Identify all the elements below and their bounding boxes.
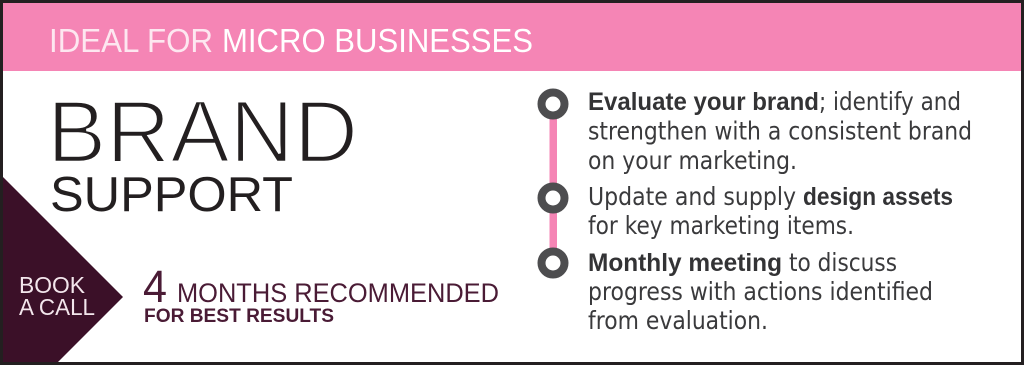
call to action arrow	[3, 177, 123, 362]
text block: evaluate your brand: Evaluate your brand	[588, 88, 819, 116]
header band	[3, 3, 1021, 71]
text block: evaluate your brand: strengthen with a consistent brand	[588, 116, 972, 146]
text block: design assets: for key marketing items.	[588, 211, 854, 240]
text block: monthly meeting: to discuss	[789, 248, 897, 277]
text block: evaluate your brand: on your marketing.	[588, 146, 797, 175]
text block: design assets	[588, 182, 953, 240]
text block: monthly meeting	[588, 248, 933, 335]
recommendation text	[143, 261, 499, 327]
call to action arrow: BOOK	[19, 272, 86, 298]
text block: monthly meeting: Monthly meeting	[588, 249, 782, 277]
timeline connector and markers	[542, 92, 564, 274]
header band: IDEAL FOR	[49, 22, 213, 59]
recommendation text: MONTHS RECOMMENDED	[177, 278, 499, 308]
text block: evaluate your brand	[588, 87, 972, 175]
text block: design assets: design assets	[803, 183, 953, 211]
call to action arrow: A CALL	[19, 294, 95, 320]
text block: monthly meeting: from evaluation.	[588, 306, 768, 335]
text block: evaluate your brand: ; identify and	[819, 87, 961, 116]
title: SUPPORT: SUPPORT	[50, 168, 293, 222]
recommendation text: 4	[143, 261, 167, 312]
text block: monthly meeting: progress with actions identified	[588, 277, 933, 306]
recommendation text: FOR BEST RESULTS	[144, 306, 334, 327]
text block: design assets: Update and supply	[588, 182, 796, 211]
header band: MICRO BUSINESSES	[222, 22, 533, 59]
title: BRAND: BRAND	[47, 82, 358, 181]
